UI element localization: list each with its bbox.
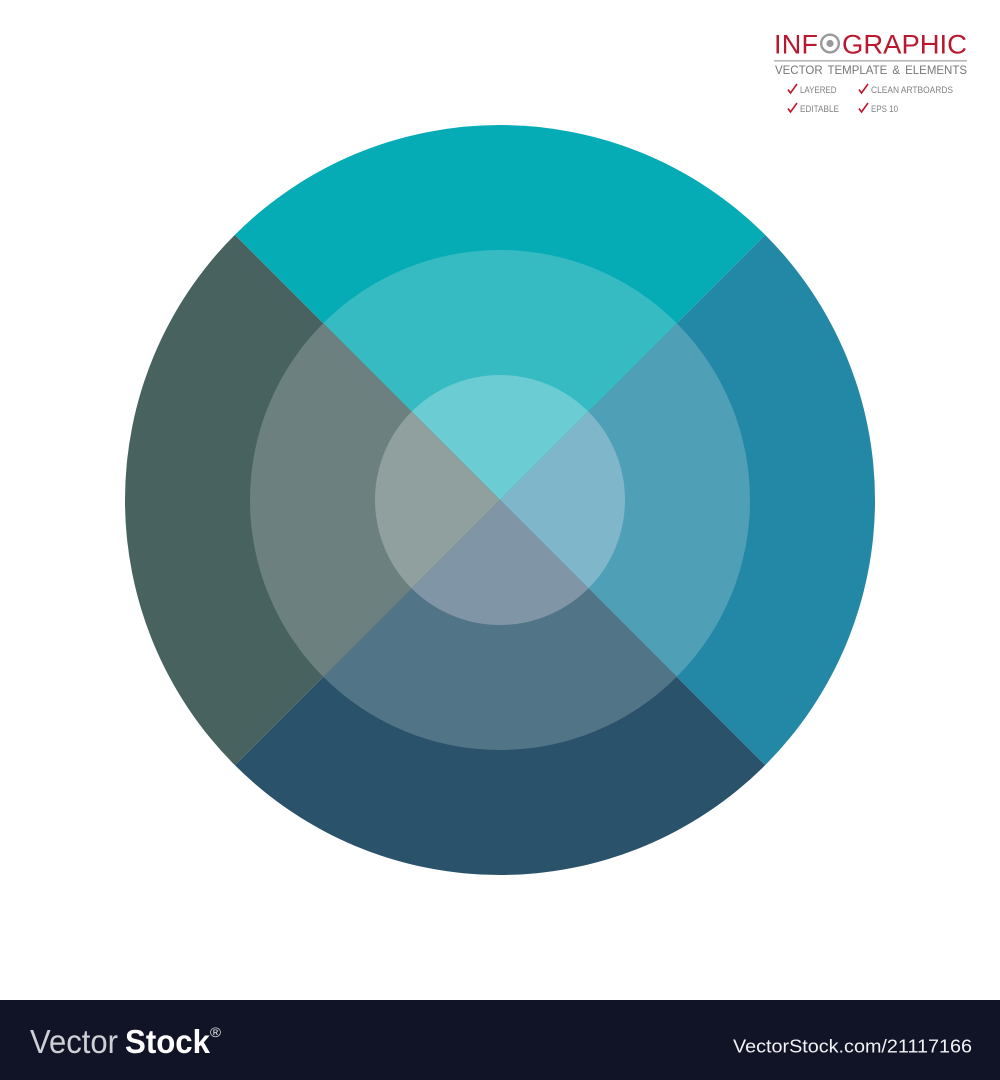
panel: left quadrant <box>125 235 500 765</box>
logo block: infographic template <box>774 30 967 114</box>
concentric circle diagram <box>125 125 875 875</box>
footer bar <box>0 1000 1000 1080</box>
panel: right quadrant <box>500 235 875 765</box>
icon: check layered <box>788 84 797 93</box>
icon: check editable <box>788 103 797 112</box>
image id url: VectorStock.com/21117166 <box>733 1036 972 1057</box>
icon: check eps 10 <box>859 103 868 112</box>
label: eps 10: EPS 10 <box>871 104 898 114</box>
heading: GRAPHIC: GRAPHIC <box>842 30 967 60</box>
panel: top quadrant <box>235 125 765 500</box>
subtitle: VECTOR TEMPLATE & ELEMENTS <box>775 63 967 77</box>
icon: check clean artboards <box>859 84 868 93</box>
heading: INF: INF <box>774 30 818 60</box>
label: clean artboards: CLEAN ARTBOARDS <box>871 85 953 95</box>
label: editable: EDITABLE <box>800 104 839 114</box>
brand: VectorStock: Stock <box>125 1023 211 1060</box>
label: layered: LAYERED <box>800 85 837 95</box>
brand: VectorStock <box>30 1023 222 1060</box>
brand: VectorStock: ® <box>210 1024 222 1040</box>
icon: target letter O <box>821 35 839 52</box>
brand: VectorStock: Vector <box>30 1023 118 1060</box>
panel: bottom quadrant <box>235 500 765 875</box>
